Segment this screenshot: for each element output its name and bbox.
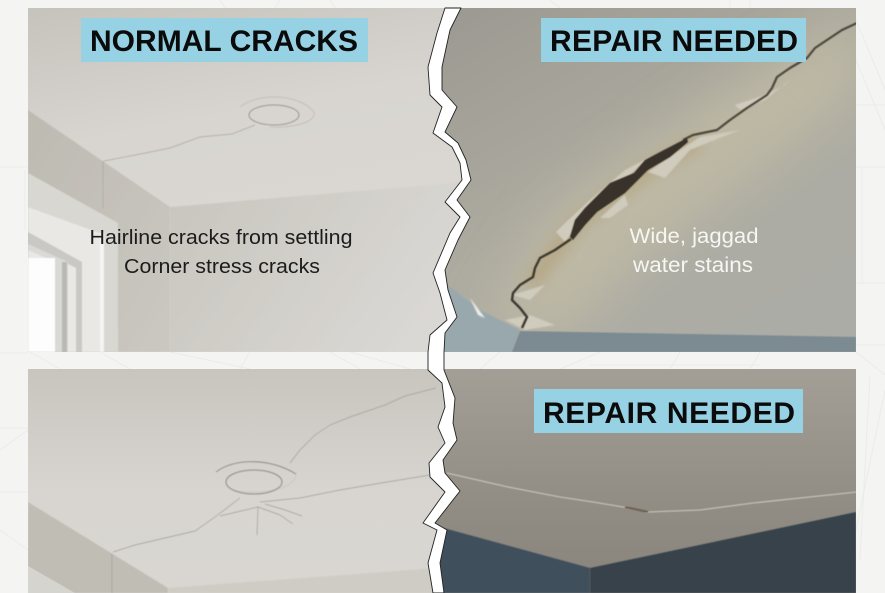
window frame <box>28 173 118 352</box>
text: normal crack types <box>90 227 352 278</box>
ceiling light fixture <box>216 462 296 494</box>
text: normal crack types: Hairline cracks from settling <box>90 227 352 249</box>
crack damage spot <box>625 507 648 512</box>
lower wall wedge <box>440 283 520 352</box>
wide jagged crack <box>512 23 857 328</box>
panel: normal cracks, top left photo <box>28 8 478 352</box>
text: repair signs <box>630 225 758 277</box>
heading: repair needed, top: REPAIR NEEDED <box>550 25 798 58</box>
flaked plaster <box>470 80 790 330</box>
left dark blue wall <box>440 527 590 593</box>
left wall <box>28 502 168 593</box>
panel: normal cracks, bottom left photo <box>28 369 478 593</box>
right wall <box>168 569 432 592</box>
panel: repair needed, top right photo <box>430 8 860 352</box>
lower wall band <box>512 331 856 352</box>
radiating cracks <box>112 388 436 593</box>
panel: repair needed, bottom right photo <box>430 369 857 593</box>
torn paper divider <box>423 8 471 593</box>
text: repair signs: water stains <box>632 254 753 277</box>
heading: normal cracks: NORMAL CRACKS <box>90 25 358 58</box>
right wall <box>170 192 374 352</box>
stained ceiling <box>430 8 856 352</box>
text: normal crack types: Corner stress cracks <box>124 256 320 278</box>
ceiling <box>28 369 478 593</box>
ceiling <box>28 8 478 352</box>
ceiling light fixture <box>240 97 314 127</box>
window trim <box>28 566 75 593</box>
long ceiling crack <box>447 473 857 512</box>
hairline crack <box>103 125 255 208</box>
left wall <box>28 110 170 352</box>
heading: repair needed, bottom: REPAIR NEEDED <box>543 397 795 430</box>
water stains <box>504 34 855 331</box>
text: repair signs: Wide, jaggad <box>630 225 758 248</box>
ceiling <box>430 369 856 593</box>
right dark blue wall <box>590 512 856 593</box>
